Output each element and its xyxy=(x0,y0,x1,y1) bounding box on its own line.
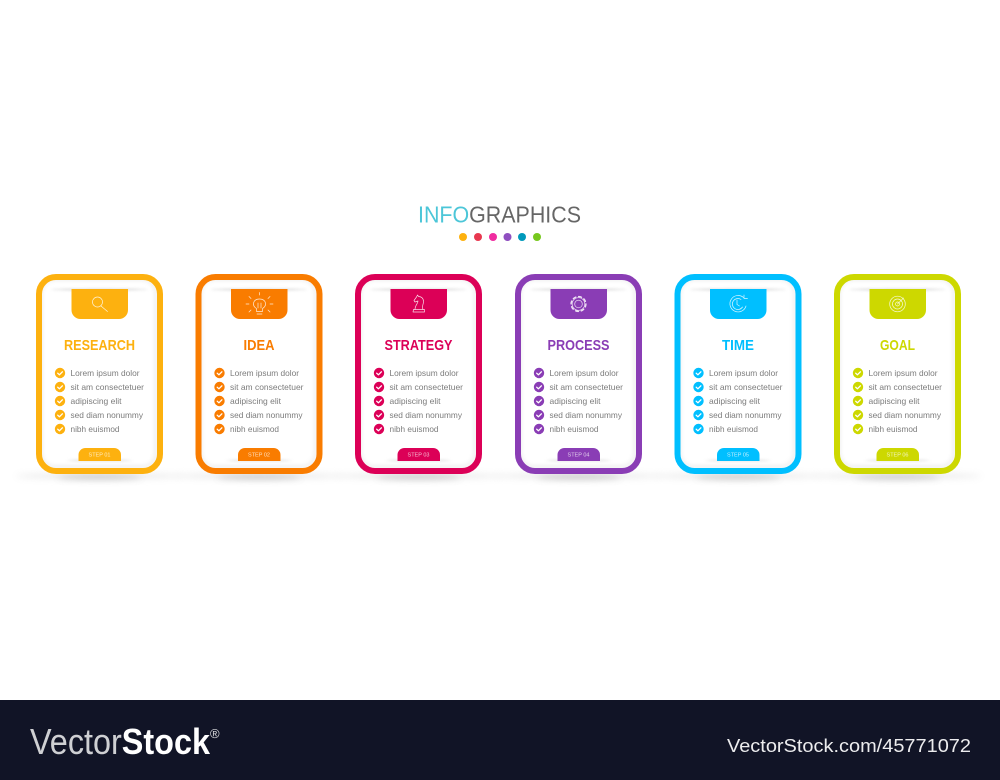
panel: strategy xyxy=(353,274,484,483)
step badge: STEP 04 xyxy=(568,452,589,458)
heading: PROCESS xyxy=(548,337,610,354)
checklist: sed diam nonummy xyxy=(868,410,942,420)
checklist xyxy=(853,368,942,434)
checklist: sed diam nonummy xyxy=(70,410,144,420)
checklist: adipiscing elit xyxy=(550,396,601,406)
checklist: sit am consectetuer xyxy=(709,382,783,392)
panel: process xyxy=(513,274,644,483)
step badge: STEP 06 xyxy=(887,452,908,458)
checklist: adipiscing elit xyxy=(390,396,441,406)
icon tab xyxy=(390,289,447,319)
checklist xyxy=(534,368,623,434)
heading: RESEARCH xyxy=(64,337,135,354)
icon tab xyxy=(231,289,288,319)
panel: research xyxy=(34,274,165,483)
checklist: sed diam nonummy xyxy=(550,410,623,420)
checklist: Lorem ipsum dolor xyxy=(550,368,619,378)
heading: IDEA xyxy=(244,337,275,354)
icon: clock with arrow xyxy=(730,295,748,312)
step badge xyxy=(558,448,600,461)
checklist xyxy=(55,368,144,434)
step badge: STEP 03 xyxy=(408,452,429,458)
colour dots xyxy=(459,233,541,241)
checklist: nibh euismod xyxy=(709,424,758,434)
step badge xyxy=(398,448,440,461)
checklist: Lorem ipsum dolor xyxy=(868,368,938,378)
panel: idea xyxy=(194,274,324,483)
registered mark: ® xyxy=(210,726,220,741)
checklist: sed diam nonummy xyxy=(230,410,303,420)
checklist: adipiscing elit xyxy=(709,396,761,406)
heading: TIME xyxy=(722,337,754,354)
logo: VectorStock: VectorStock xyxy=(30,721,211,762)
checklist: Lorem ipsum dolor xyxy=(230,368,299,378)
icon: target xyxy=(890,296,905,312)
step badge xyxy=(717,448,760,461)
step badge xyxy=(876,448,919,461)
icon tab xyxy=(870,289,926,319)
step badge: STEP 02 xyxy=(248,452,270,458)
checklist: sit am consectetuer xyxy=(390,382,463,392)
step badge: STEP 01 xyxy=(89,452,110,458)
checklist xyxy=(374,368,463,434)
checklist: sit am consectetuer xyxy=(550,382,623,392)
checklist: sed diam nonummy xyxy=(709,410,782,420)
heading: GOAL xyxy=(880,337,915,354)
checklist: Lorem ipsum dolor xyxy=(709,368,778,378)
panel: time xyxy=(672,274,804,483)
checklist: sit am consectetuer xyxy=(868,382,942,392)
checklist: nibh euismod xyxy=(230,424,279,434)
checklist: adipiscing elit xyxy=(868,396,920,406)
step badge xyxy=(78,448,121,461)
heading: STRATEGY xyxy=(384,337,452,354)
icon tab xyxy=(72,289,128,319)
checklist: adipiscing elit xyxy=(70,396,122,406)
checklist: sed diam nonummy xyxy=(390,410,463,420)
checklist: nibh euismod xyxy=(550,424,599,434)
checklist xyxy=(214,368,304,434)
icon: magnifier xyxy=(92,297,108,312)
checklist: nibh euismod xyxy=(70,424,120,434)
image id: VectorStock.com/45771072 xyxy=(727,735,971,756)
step badge: STEP 05 xyxy=(727,452,749,458)
title: INFOGRAPHICS xyxy=(418,202,581,228)
step badge xyxy=(238,448,280,461)
checklist: nibh euismod xyxy=(390,424,439,434)
checklist: nibh euismod xyxy=(868,424,918,434)
checklist: adipiscing elit xyxy=(230,396,282,406)
checklist: Lorem ipsum dolor xyxy=(70,368,140,378)
icon tab xyxy=(710,289,766,319)
checklist: sit am consectetuer xyxy=(70,382,144,392)
checklist: sit am consectetuer xyxy=(230,382,304,392)
icon: light bulb xyxy=(246,292,273,314)
icon tab xyxy=(550,289,607,319)
checklist xyxy=(693,368,783,434)
panel: goal xyxy=(832,274,963,483)
icon: chess knight xyxy=(413,295,424,312)
checklist: Lorem ipsum dolor xyxy=(390,368,459,378)
footer bar xyxy=(0,700,1000,780)
icon: gear xyxy=(571,297,586,311)
